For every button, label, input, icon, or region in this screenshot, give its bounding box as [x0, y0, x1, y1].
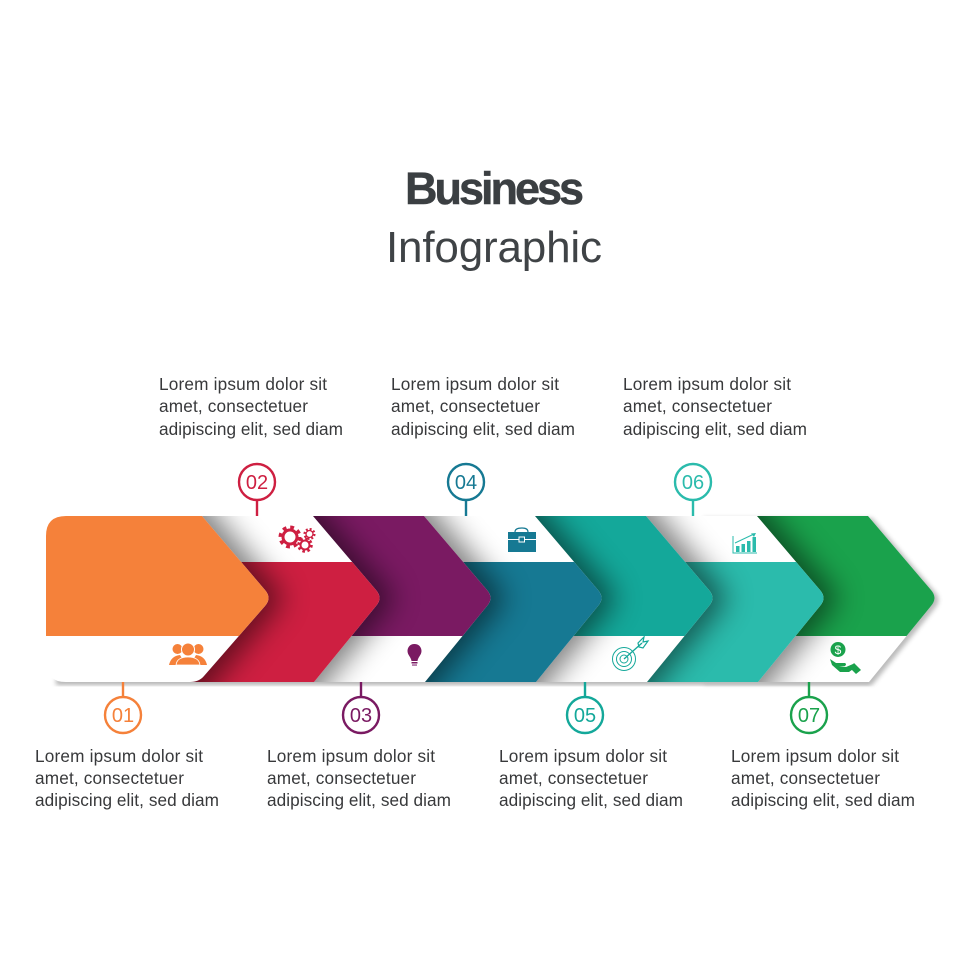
- icon: gears: [280, 528, 314, 551]
- icon: briefcase: [508, 528, 536, 552]
- text block 01: amet, consectetuer: [35, 768, 184, 788]
- arrow 01: orange: [46, 516, 268, 682]
- text block 03: amet, consectetuer: [267, 768, 416, 788]
- title: [386, 163, 602, 272]
- text block 06: [623, 374, 807, 439]
- icon: light bulb: [408, 644, 422, 666]
- text block 01: Lorem ipsum dolor sit: [35, 746, 203, 766]
- text block 06: amet, consectetuer: [623, 396, 772, 416]
- marker 01: [105, 682, 141, 733]
- marker 05: 05: [574, 705, 596, 727]
- text block 05: Lorem ipsum dolor sit: [499, 746, 667, 766]
- arrow 04: blue: [424, 516, 602, 682]
- marker 03: 03: [350, 705, 372, 727]
- icon: target with arrow: [612, 637, 648, 670]
- title line: Business: Business: [405, 163, 584, 214]
- icon: hand holding dollar: [830, 642, 861, 674]
- text block 01: adipiscing elit, sed diam: [35, 790, 219, 810]
- arrow 02: crimson: [190, 516, 380, 682]
- text block 07: amet, consectetuer: [731, 768, 880, 788]
- text block 02: amet, consectetuer: [159, 396, 308, 416]
- text block 02: Lorem ipsum dolor sit: [159, 374, 327, 394]
- arrow 05: teal: [535, 516, 712, 682]
- text block 07: Lorem ipsum dolor sit: [731, 746, 899, 766]
- text block 06: adipiscing elit, sed diam: [623, 419, 807, 439]
- title line: Infographic: Infographic: [386, 223, 602, 272]
- marker 01: 01: [112, 705, 134, 727]
- text block 03: adipiscing elit, sed diam: [267, 790, 451, 810]
- text block 05: adipiscing elit, sed diam: [499, 790, 683, 810]
- text block 04: adipiscing elit, sed diam: [391, 419, 575, 439]
- marker 06: 06: [682, 472, 704, 494]
- marker 04: 04: [455, 472, 477, 494]
- marker 02: [239, 464, 275, 516]
- icon: hand holding dollar: $: [835, 643, 842, 657]
- marker 03: [343, 682, 379, 733]
- arrow 06: light teal: [646, 516, 824, 682]
- marker 05: [567, 682, 603, 733]
- marker 07: 07: [798, 705, 820, 727]
- text block 03: Lorem ipsum dolor sit: [267, 746, 435, 766]
- band ground shadow: [56, 518, 938, 685]
- text block 04: Lorem ipsum dolor sit: [391, 374, 559, 394]
- text block 07: adipiscing elit, sed diam: [731, 790, 915, 810]
- marker 04: [448, 464, 484, 516]
- arrow 03: purple: [313, 516, 490, 682]
- text block 01: [35, 746, 219, 810]
- text block 03: [267, 746, 451, 810]
- text block 02: [159, 374, 343, 439]
- text block 06: Lorem ipsum dolor sit: [623, 374, 791, 394]
- text block 07: [731, 746, 915, 810]
- icon: people: [169, 643, 207, 665]
- text block 04: [391, 374, 575, 439]
- text block 04: amet, consectetuer: [391, 396, 540, 416]
- arrow 07: green: [757, 516, 934, 682]
- marker 02: 02: [246, 472, 268, 494]
- marker 07: [791, 682, 827, 733]
- arrow band: [46, 516, 941, 686]
- icon: growth chart: [733, 533, 757, 553]
- text block 05: [499, 746, 683, 810]
- marker 06: [675, 464, 711, 516]
- text block 02: adipiscing elit, sed diam: [159, 419, 343, 439]
- text block 05: amet, consectetuer: [499, 768, 648, 788]
